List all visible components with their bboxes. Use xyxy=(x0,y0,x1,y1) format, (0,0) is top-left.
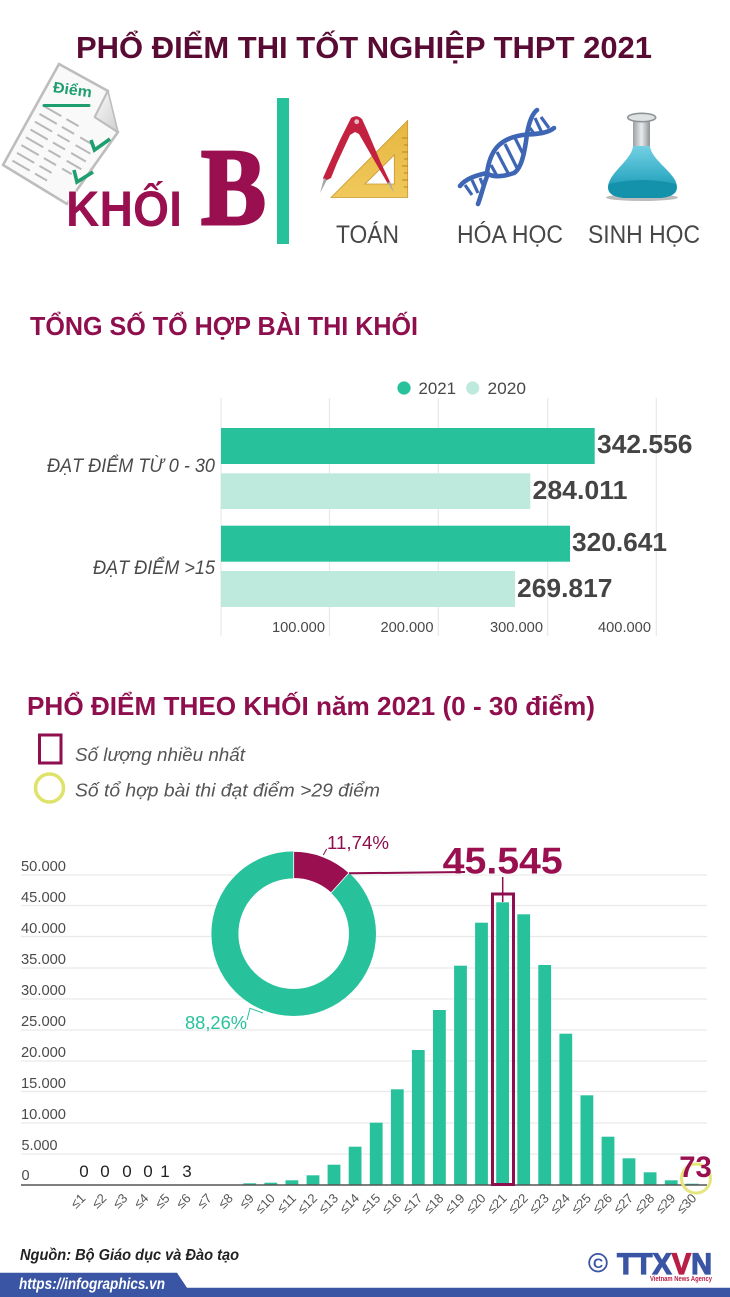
axis labels xyxy=(272,620,651,636)
heading: score distribution: PHỔ ĐIỂM THEO KHỐI năm 2021 (0 - 30 điểm) xyxy=(27,691,595,721)
subject: toán xyxy=(320,116,408,249)
value labels: 269.817 xyxy=(517,573,612,603)
x axis labels: ≤30 xyxy=(673,1191,699,1216)
label: HÓA HỌC xyxy=(457,220,563,249)
x axis labels: ≤21 xyxy=(484,1191,510,1216)
bar chart: total combinations xyxy=(47,398,692,636)
y axis labels xyxy=(21,859,66,1184)
value labels xyxy=(517,429,692,603)
category labels xyxy=(47,454,215,579)
x axis labels: ≤1 xyxy=(68,1191,88,1211)
y axis labels: 40.000 xyxy=(21,921,66,937)
x axis labels: ≤11 xyxy=(274,1191,299,1216)
x axis labels: ≤4 xyxy=(131,1191,152,1211)
low score values: 0 xyxy=(100,1162,110,1181)
label: TOÁN xyxy=(336,220,399,249)
x axis labels: ≤23 xyxy=(526,1191,552,1216)
logo: TTXVN: TTXVN xyxy=(617,1248,712,1281)
label: 88,26%: 88,26% xyxy=(185,1012,247,1033)
icon: exam paper: Điểm xyxy=(52,79,93,101)
x axis labels: ≤28 xyxy=(631,1191,657,1216)
low score values: 3 xyxy=(182,1162,192,1181)
value labels: 284.011 xyxy=(532,475,628,505)
heading: khối B: B xyxy=(201,127,266,248)
icon: compass and set square xyxy=(320,116,408,198)
category labels: ĐẠT ĐIỂM TỪ 0 - 30 xyxy=(47,454,215,477)
legend: years xyxy=(397,379,526,398)
x axis labels: ≤13 xyxy=(315,1191,341,1216)
icon: exam paper xyxy=(3,64,118,204)
legend: years: 2020 xyxy=(488,379,526,398)
y axis labels: 50.000 xyxy=(21,859,66,875)
y axis labels: 45.000 xyxy=(21,890,66,906)
divider bar xyxy=(277,98,289,244)
connector to peak value xyxy=(349,872,465,873)
legend: distribution markers: Số tổ hợp bài thi đạt điểm >29 điểm xyxy=(75,780,380,800)
value labels: 320.641 xyxy=(572,527,667,557)
x axis labels: ≤25 xyxy=(568,1191,594,1216)
category labels: ĐẠT ĐIỂM >15 xyxy=(93,556,215,579)
x axis labels: ≤12 xyxy=(294,1191,320,1216)
x axis labels: ≤5 xyxy=(152,1191,173,1211)
x axis labels: ≤22 xyxy=(505,1191,531,1216)
label: 88,26% xyxy=(185,1008,263,1033)
x axis labels: ≤15 xyxy=(357,1191,383,1216)
legend: distribution markers xyxy=(36,735,380,802)
highlight: top score: 73 xyxy=(679,1151,712,1184)
low score values: 0 xyxy=(143,1162,153,1181)
y axis labels: 15.000 xyxy=(21,1076,66,1092)
subject: sinh học xyxy=(588,113,700,249)
donut chart: share of scores xyxy=(185,832,465,1033)
website url: https://infographics.vn xyxy=(19,1276,165,1293)
histogram: score distribution xyxy=(21,840,712,1216)
y axis labels: 5.000 xyxy=(22,1138,58,1154)
x axis labels: ≤20 xyxy=(463,1191,489,1216)
x axis labels: ≤9 xyxy=(236,1191,257,1211)
title: PHỔ ĐIỂM THI TỐT NGHIỆP THPT 2021 xyxy=(76,29,652,65)
y axis labels: 0 xyxy=(22,1168,30,1184)
x axis labels: ≤16 xyxy=(379,1191,404,1216)
legend: years: 2021 xyxy=(418,379,456,398)
x axis labels: ≤18 xyxy=(421,1191,447,1216)
x axis labels: ≤26 xyxy=(589,1191,615,1216)
y axis labels: 35.000 xyxy=(21,952,66,968)
x axis labels: ≤29 xyxy=(652,1191,678,1216)
logo: TTXVN: C xyxy=(593,1255,603,1271)
axis labels: 400.000 xyxy=(598,620,651,636)
y axis labels: 30.000 xyxy=(21,983,66,999)
segment: 11,74% xyxy=(294,851,349,893)
callout: peak value xyxy=(443,840,563,902)
axis labels: 300.000 xyxy=(490,620,543,636)
x axis labels: ≤3 xyxy=(110,1191,130,1211)
x axis labels: ≤6 xyxy=(173,1191,194,1211)
icon: DNA helix xyxy=(460,110,554,204)
logo: TTXVN: Vietnam News Agency xyxy=(650,1276,712,1283)
axis labels: 100.000 xyxy=(272,620,325,636)
x axis labels: ≤14 xyxy=(336,1191,362,1216)
low score values: 1 xyxy=(160,1162,170,1181)
x axis labels: ≤24 xyxy=(547,1191,573,1216)
low score values xyxy=(79,1162,192,1181)
value labels: 342.556 xyxy=(597,429,692,459)
callout: peak value: 45.545 xyxy=(443,840,563,881)
heading: khối B xyxy=(66,127,266,248)
label: SINH HỌC xyxy=(588,221,700,249)
x axis labels: ≤19 xyxy=(442,1191,468,1216)
label: 11,74%: 11,74% xyxy=(327,832,389,853)
x axis labels: ≤8 xyxy=(215,1191,236,1211)
heading: khối B: KHỐI xyxy=(66,180,182,237)
low score values: 0 xyxy=(79,1162,89,1181)
x axis labels: ≤10 xyxy=(252,1191,278,1216)
y axis labels: 10.000 xyxy=(21,1107,66,1123)
y axis labels: 25.000 xyxy=(21,1014,66,1030)
x axis labels: ≤27 xyxy=(610,1191,636,1216)
axis labels: 200.000 xyxy=(380,620,434,636)
legend: distribution markers: Số lượng nhiều nhất xyxy=(75,744,246,765)
low score values: 0 xyxy=(122,1162,132,1181)
highlight: peak bar xyxy=(492,894,514,1184)
heading: total combinations: TỔNG SỐ TỔ HỢP BÀI THI KHỐI xyxy=(30,311,418,341)
icon: flask xyxy=(606,113,678,201)
bars xyxy=(243,902,699,1184)
y axis labels: 20.000 xyxy=(21,1045,66,1061)
subject: hóa học xyxy=(457,110,563,249)
x axis labels: ≤17 xyxy=(400,1191,425,1216)
x axis labels: ≤2 xyxy=(89,1191,109,1211)
footer band xyxy=(0,1273,730,1297)
x axis labels: ≤7 xyxy=(194,1191,215,1211)
bars 2021 and 2020 xyxy=(221,428,595,607)
x axis labels xyxy=(68,1191,699,1216)
source note: Nguồn: Bộ Giáo dục và Đào tạo xyxy=(20,1247,239,1264)
